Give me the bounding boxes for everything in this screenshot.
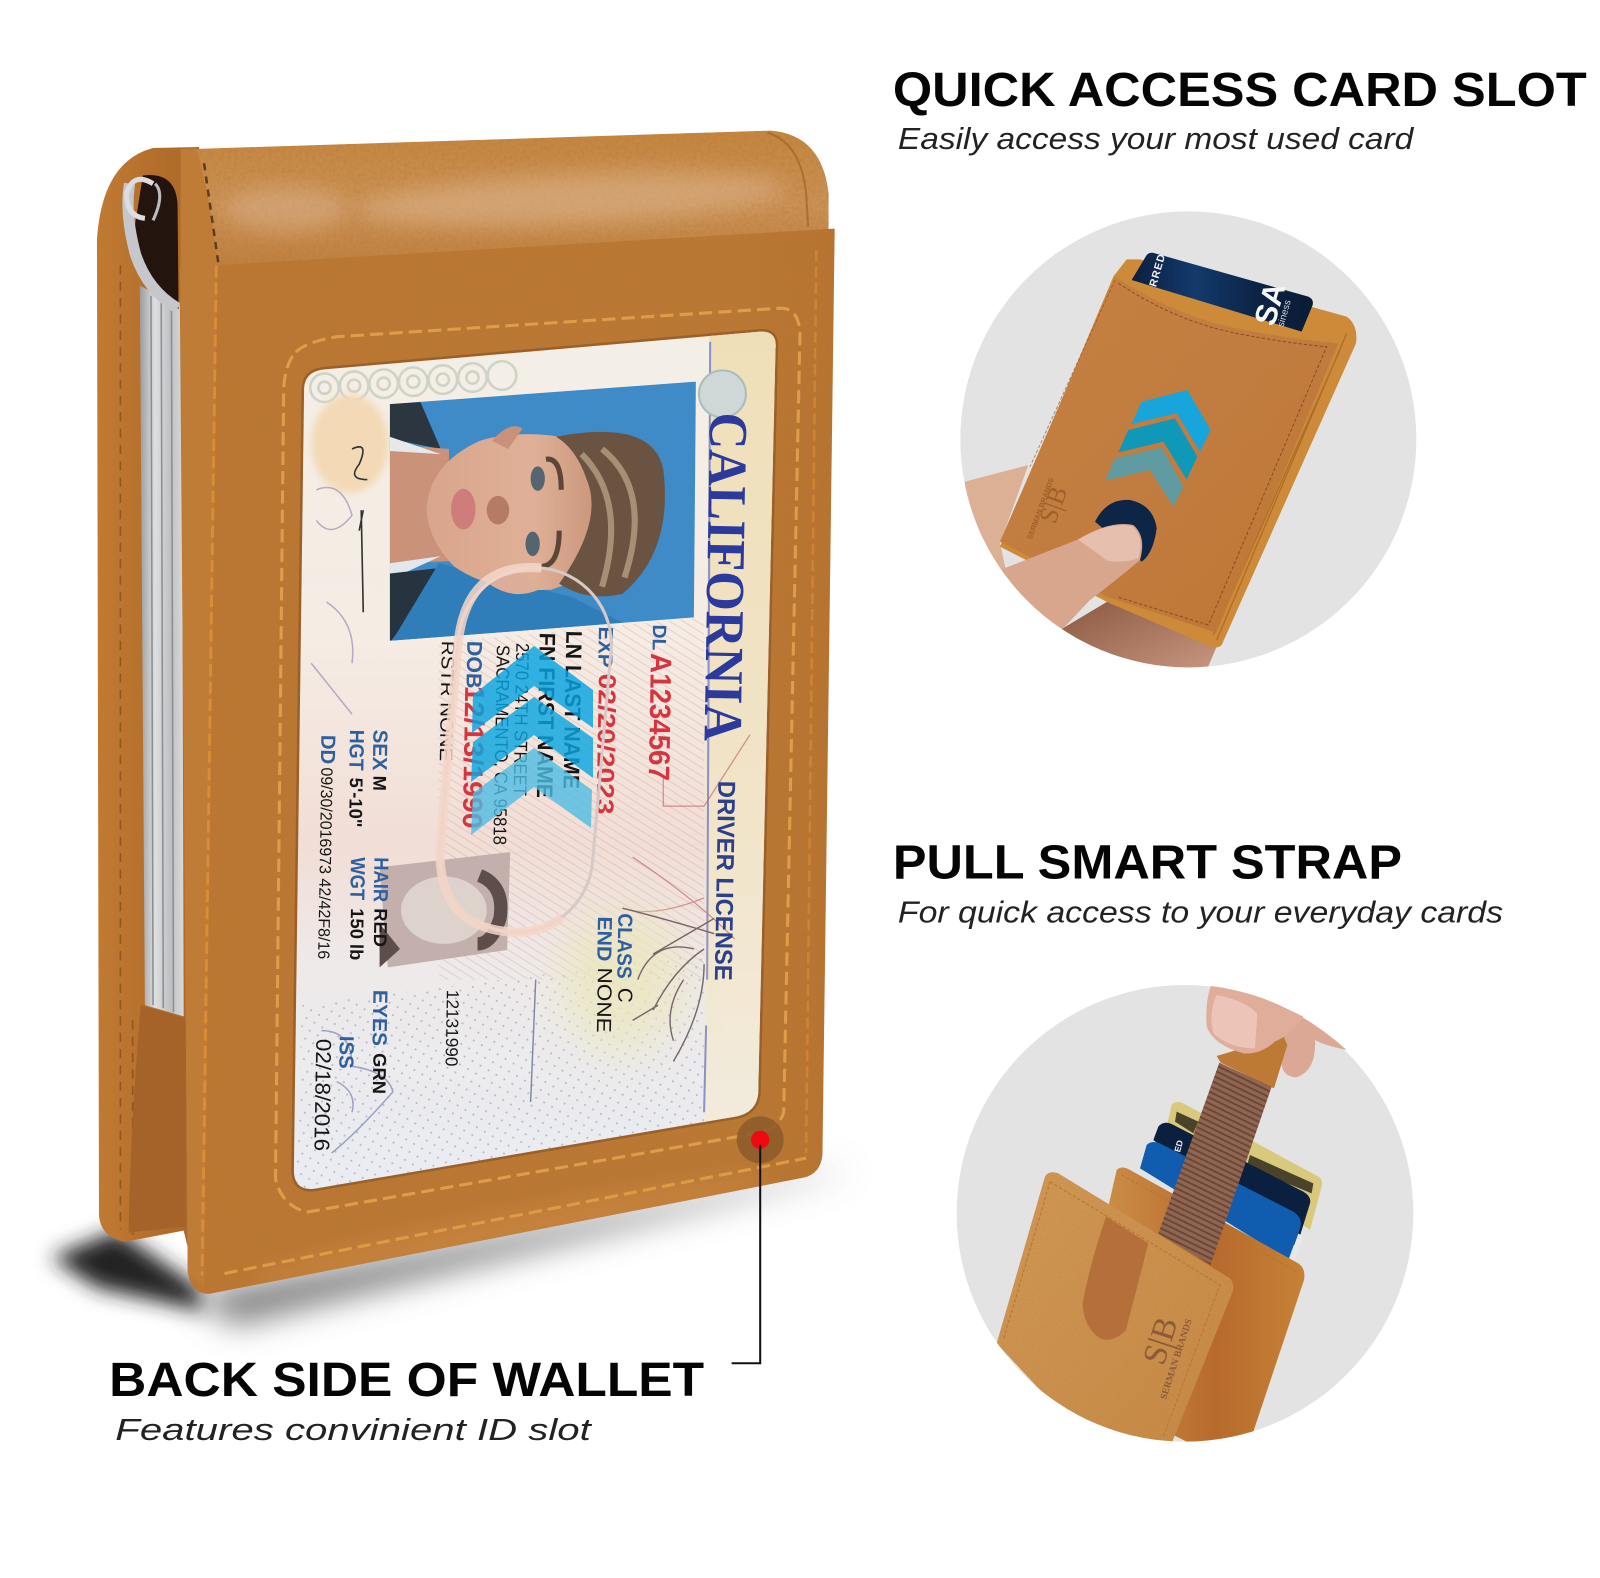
license text: 12/13/1990 — [457, 686, 490, 829]
wallet spine and back layers — [97, 147, 219, 1294]
lower hand — [1062, 602, 1216, 668]
signature — [352, 447, 367, 612]
palm and fingers — [965, 465, 1028, 575]
license text: CALIFORNIA — [692, 412, 759, 742]
front leather panel — [997, 1172, 1233, 1443]
license text: LN LAST NAME — [559, 631, 586, 789]
guilloche circles — [310, 361, 516, 402]
card in slot — [1132, 252, 1313, 332]
thumb — [1001, 524, 1142, 629]
pull slot cutout — [1083, 1217, 1148, 1340]
license text: END — [592, 916, 615, 962]
panel: pull smart strap photo circle — [957, 985, 1413, 1443]
license text: WGT — [345, 857, 368, 901]
tree squiggle — [622, 908, 714, 1061]
embossed logo: S|B — [1033, 482, 1073, 527]
license text: HGT — [344, 729, 367, 771]
license text: DOB — [462, 641, 486, 689]
card in slot: SA — [1248, 279, 1292, 329]
license text — [309, 412, 759, 1151]
heading: quick access card slot: QUICK ACCESS CARD SLOT — [893, 64, 1587, 117]
circle background — [960, 211, 1416, 667]
clear ring — [433, 561, 618, 939]
chevrons — [1105, 390, 1211, 507]
license text: DRIVER LICENSE — [709, 781, 739, 981]
pink security lines — [439, 617, 704, 980]
license text: CLASS — [612, 913, 635, 979]
floral line art — [311, 488, 353, 714]
license text: 09/30/2016973 42/42F8/16 — [314, 767, 335, 959]
license text: DL — [648, 624, 670, 651]
rear wallet panel — [1108, 1167, 1304, 1443]
wallet edge layers — [1213, 333, 1347, 640]
back wallet layer — [1000, 259, 1356, 647]
license text: DD — [316, 735, 338, 764]
license text: 2570 24TH STREET — [510, 643, 533, 796]
caption: pull smart strap: For quick access to your everyday cards — [898, 895, 1503, 929]
license text: A1234567 — [642, 653, 677, 781]
callout leader line — [732, 1145, 760, 1363]
embossed logo — [1136, 1313, 1195, 1401]
thumb gripping the tab — [1206, 986, 1303, 1054]
license text: C — [613, 988, 635, 1003]
license text: EXP — [593, 626, 616, 668]
ribbed strap — [1158, 1036, 1287, 1265]
license text: ISS — [334, 1036, 357, 1069]
panel: quick access photo circle — [960, 211, 1416, 673]
top flap — [194, 131, 829, 278]
license header strip — [704, 327, 781, 1122]
license text: SEX — [368, 729, 390, 771]
cards stack: ED — [1172, 1139, 1185, 1153]
card in slot: RRED — [1147, 252, 1168, 288]
peach watermark — [311, 395, 389, 493]
chevrons printed on inner card — [471, 646, 593, 835]
embossed logo: SERMAN BRANDS — [1158, 1318, 1195, 1401]
license text: M — [369, 775, 390, 791]
license text: 02/20/2023 — [591, 673, 620, 815]
seal — [699, 370, 746, 417]
embossed logo — [1028, 478, 1066, 540]
left inner pocket — [129, 1005, 186, 1233]
driver license in ID window — [286, 327, 786, 1194]
rear finger — [1210, 987, 1347, 1077]
circle background — [957, 985, 1413, 1442]
license text: 5'-10" — [345, 777, 367, 828]
caption: back side of wallet: Features convinient ID slot — [115, 1413, 593, 1447]
card in slot: siness — [1276, 299, 1294, 328]
ghost portrait — [380, 852, 510, 967]
license text: EYES — [367, 990, 390, 1046]
wallet ground shadow — [51, 1169, 852, 1324]
license text: NONE — [592, 967, 615, 1033]
license text: SACRAMENTO, CA 95818 — [489, 645, 514, 845]
spine stitches — [120, 265, 133, 1235]
leather strap tab — [1217, 1036, 1287, 1088]
callout marker — [737, 1116, 784, 1163]
ID portrait photo — [390, 382, 696, 641]
stack of cards edge — [140, 286, 184, 1016]
finger hole — [1095, 500, 1157, 562]
license text: 150 lb — [346, 908, 368, 961]
license text: 12131990 — [442, 990, 463, 1067]
caption: quick access: Easily access your most used card — [898, 122, 1414, 156]
heading: pull smart strap: PULL SMART STRAP — [893, 837, 1402, 890]
cards stack — [1140, 1102, 1322, 1263]
license text: RED — [370, 908, 391, 947]
lower dot field — [296, 954, 704, 1194]
front leather panel — [1000, 277, 1338, 633]
heading: back side of wallet: BACK SIDE OF WALLET — [109, 1354, 704, 1407]
license text: GRN — [369, 1053, 390, 1094]
yellow tint — [561, 908, 684, 1051]
embossed logo: S|B — [1136, 1313, 1186, 1369]
left folded band — [181, 148, 217, 1288]
license text: FN FIRST NAME — [532, 633, 560, 798]
wave line art — [321, 1031, 393, 1153]
embossed logo: SERMAN BRANDS — [1025, 476, 1056, 541]
license text: RSTR NONE — [436, 641, 459, 761]
front leather panel — [180, 148, 835, 1298]
license text: 02/18/2016 — [309, 1039, 335, 1151]
license text: HAIR — [369, 857, 391, 903]
photo contents — [963, 252, 1356, 673]
metal money clip — [127, 175, 179, 309]
